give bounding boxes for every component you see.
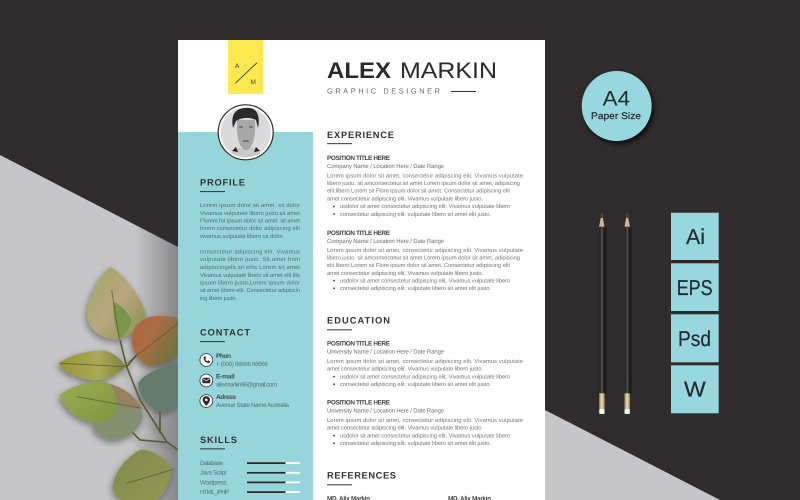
education entry 2: consectetur adipiscing elit. vulputate libero sit amet elit justo. xyxy=(340,440,491,447)
education entry 1: consectetur adipiscing elit. vulputate libero sit amet elit justo. xyxy=(340,381,491,388)
monogram tag: M xyxy=(250,79,256,86)
education entry 1: usdolor sit amet consectetur adipiscing elit. Vivamus vulputate libero xyxy=(340,373,510,380)
contact: phone xyxy=(200,353,269,368)
references names xyxy=(327,496,491,500)
contact: address xyxy=(200,394,290,409)
format badge: Psd: Psd xyxy=(678,327,711,351)
profile photo xyxy=(218,105,273,160)
profile text: Florem for ipsum dolor sit amet. sit amet xyxy=(200,218,300,224)
badge: A4 paper size: A4 xyxy=(603,88,630,111)
experience entry 1 xyxy=(327,155,523,218)
profile text: Lorem ipsum dolor sit amet. sit dolor xyxy=(200,202,300,209)
education entry 1: POSITION TITLE HERE xyxy=(327,341,391,348)
format badge: EPS xyxy=(671,263,719,311)
grey diagonal surface xyxy=(0,155,720,500)
contact: phone: + (000) 66666 66666 xyxy=(216,361,269,368)
format badge: W xyxy=(671,365,719,413)
experience entry 2: Lorem ipsum dolor sit amet, consectetur adipiscing elit. Vivamus vulputate xyxy=(327,247,523,254)
pencil 1 xyxy=(599,212,606,414)
experience entry 2: libero justo. sit amconsectetur.sit amet Lorem ipsum dolor sit amet, adipiscing xyxy=(327,255,520,262)
education entry 2: University Name / Location Here / Date Range xyxy=(327,408,445,415)
education entry 1: Lorem ipsum dolor sit amet, consectetur adipiscing elit. Vivamus vulputate xyxy=(327,358,523,365)
skill bars: HTML_/PHP xyxy=(200,489,229,496)
badge: A4 paper size xyxy=(582,71,654,144)
sidebar heading: profile: PROFILE xyxy=(200,178,245,188)
contact: email: alexmarkin66@gmail.com xyxy=(216,381,277,388)
education entry 2: amet consectetur adipiscing elit. Vivamus vulputate libero justo. xyxy=(327,425,483,432)
heading: references: REFERENCES xyxy=(327,470,396,480)
profile text: Vivamus vulputate libero justo.sit amet xyxy=(200,210,300,217)
format badge: Psd xyxy=(671,314,719,362)
contact: email xyxy=(200,374,277,388)
experience entry 1: usdolor sit amet consectetur adipiscing elit. Vivamus vulputate libero xyxy=(340,203,510,210)
profile text: sit amet libero elit. Consectetur adipiscin xyxy=(200,287,300,294)
format badge: W: W xyxy=(684,378,706,402)
experience entry 1: amet consectetur adipiscing elit. Vivamus vulputate libero justo. xyxy=(327,196,483,202)
experience entry 2: POSITION TITLE HERE xyxy=(327,230,391,237)
monogram tag xyxy=(228,40,263,94)
sidebar heading: contact xyxy=(200,328,250,342)
profile text: ing libero justo. xyxy=(200,295,237,302)
illustration: eucalyptus leaves xyxy=(58,267,178,500)
sidebar heading: contact: CONTACT xyxy=(200,328,250,338)
experience entry 2: elit.libero Lorem sit Flore ipsum dolor sit amet. Consectetur adipiscing elit xyxy=(327,262,510,269)
experience entry 1: POSITION TITLE HERE xyxy=(327,155,391,162)
format badge: Ai xyxy=(671,213,719,260)
profile text: adipiscingelit.sit elits Lorem sit amet xyxy=(200,264,300,271)
skill bars: Java Script xyxy=(200,470,227,477)
format badge: Ai: Ai xyxy=(686,225,705,249)
heading: references xyxy=(327,470,396,485)
profile text: lorem consectetur dolor adipiscing elit xyxy=(200,225,300,232)
skill bars: Wordpress xyxy=(200,479,227,486)
experience entry 1: Lorem ipsum dolor sit amet, consectetur adipiscing elit. Vivamus vulputate xyxy=(327,172,523,179)
experience entry 1: elit.libero Lorem sit Flore ipsum dolor sit amet. Consectetur adipiscing elit xyxy=(327,188,510,195)
skill bars xyxy=(200,460,300,496)
name heading: MARKIN xyxy=(400,58,497,83)
education entry 2 xyxy=(327,400,523,447)
experience entry 2 xyxy=(327,230,523,292)
heading: education xyxy=(327,316,390,330)
heading: education: EDUCATION xyxy=(327,316,390,326)
experience entry 2: Company Name / Location Here / Date Range xyxy=(327,238,445,245)
sidebar heading: skills: SKILLS xyxy=(200,435,237,445)
profile text xyxy=(200,202,300,302)
experience entry 1: Company Name / Location Here / Date Range xyxy=(327,163,445,170)
sidebar heading: profile xyxy=(200,178,245,192)
skill bars: Database xyxy=(200,460,224,467)
experience entry 1: consectetur adipiscing elit. vulputate libero sit amet elit justo. xyxy=(340,211,491,218)
format badge: EPS: EPS xyxy=(677,276,713,300)
education entry 2: usdolor sit amet consectetur adipiscing elit. Vivamus vulputate libero xyxy=(340,432,510,439)
contact: address: Avenue State Name Australia xyxy=(216,402,290,409)
contact: address: Adress xyxy=(216,394,236,401)
profile text: ipsum libero justo.Lorem ipsum dolor xyxy=(200,280,300,287)
monogram tag: A xyxy=(235,63,240,70)
name heading xyxy=(327,58,497,83)
experience entry 2: usdolor sit amet consectetur adipiscing elit. Vivamus vulputate libero xyxy=(340,278,510,284)
contact: email: E-mail xyxy=(216,374,235,381)
profile text: Vivamus vulputate libero sit amet elit life xyxy=(200,272,300,279)
profile text: consectetur adipiscing elit. Vivamus xyxy=(200,248,300,255)
experience entry 1: libero justo. sit amconsectetur.sit amet Lorem ipsum dolor sit amet, adipiscing xyxy=(327,180,520,187)
education entry 2: Lorem ipsum dolor sit amet, consectetur adipiscing elit. Vivamus vulputate xyxy=(327,417,523,424)
shadow cast by resume page xyxy=(140,228,178,500)
profile text: vivamus.vulputate libero us dolor. xyxy=(200,233,284,240)
education entry 2: POSITION TITLE HERE xyxy=(327,400,391,407)
name heading: ALEX xyxy=(327,58,391,83)
experience entry 2: amet consectetur adipiscing elit. Vivamus vulputate libero justo. xyxy=(327,270,483,277)
education entry 1: amet consectetur adipiscing elit. Vivamus vulputate libero justo. xyxy=(327,366,483,373)
resume page xyxy=(178,40,545,500)
heading: experience: EXPERIENCE xyxy=(327,130,394,140)
job title: GRAPHIC DESIGNER xyxy=(327,86,440,96)
pencil 2 xyxy=(624,212,632,414)
badge: A4 paper size: Paper Size xyxy=(591,111,641,122)
contact: phone: Phon xyxy=(216,353,231,360)
experience entry 2: consectetur adipiscing elit. vulputate libero sit amet elit justo. xyxy=(340,285,491,292)
profile text: vulputate libero justo. Sit amet from xyxy=(200,256,300,263)
education entry 1 xyxy=(327,341,523,388)
sidebar heading: skills xyxy=(200,435,237,449)
education entry 1: University Name / Location Here / Date Range xyxy=(327,348,445,356)
sidebar panel xyxy=(178,132,313,500)
